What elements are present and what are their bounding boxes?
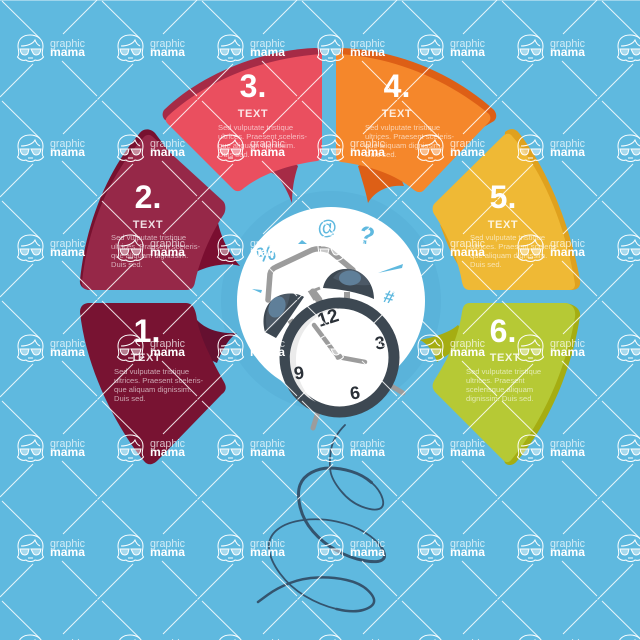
alarm clock: [263, 249, 403, 428]
icon: wedge right: [378, 264, 403, 273]
icon: question mark: ?: [356, 221, 377, 251]
number 2: 2.: [135, 179, 161, 215]
body text 5: Duis sed.: [470, 260, 502, 269]
body text 5: [470, 233, 560, 269]
body text 3: Duis sed.: [218, 150, 250, 159]
body text 1: ultrices. Praesent sceleris-: [114, 376, 204, 385]
number 4: 4.: [384, 68, 410, 104]
body text 2: Sed vulputate tristique: [111, 233, 186, 242]
top knob: [313, 292, 319, 300]
body text 6: scelerisque aliquam: [466, 385, 533, 394]
numerals: [293, 305, 386, 404]
body text 1: Duis sed.: [114, 394, 146, 403]
numerals: 12: [315, 305, 341, 332]
body text 2: [111, 233, 201, 269]
icon: wedge left: [252, 289, 262, 293]
left bell: [263, 294, 304, 338]
spring: [258, 425, 384, 611]
feet: [313, 384, 403, 428]
label 6: TEXT: [490, 352, 520, 364]
icon: triangle: [298, 240, 307, 244]
panel 2: [80, 129, 240, 290]
white clock disc: [237, 207, 425, 395]
bell handle: [268, 249, 353, 300]
floating symbols: [252, 215, 403, 308]
label 5: TEXT: [488, 219, 518, 231]
numerals: 9: [293, 362, 305, 384]
body text 6: ultrices. Praesent: [466, 376, 526, 385]
body text 4: que aliquam dignissim.: [365, 141, 442, 150]
body text 4: [365, 123, 455, 159]
body text 5: ultrices. Praesent sceleris-: [470, 242, 560, 251]
panel 1: [80, 303, 237, 464]
top edge line: [0, 0, 640, 1]
label 4: TEXT: [382, 108, 412, 120]
number 5: 5.: [490, 179, 516, 215]
label 2: TEXT: [133, 219, 163, 231]
body text 1: Sed vulputate tristique: [114, 367, 189, 376]
body text 4: Sed vulputate tristique: [365, 123, 440, 132]
body text 6: [466, 367, 541, 403]
clock hands: [314, 325, 365, 362]
body text 4: Duis sed.: [365, 150, 397, 159]
body text 2: que aliquam dignissim.: [111, 251, 188, 260]
icon: hash: #: [382, 286, 396, 308]
body text 4: ultrices. Praesent sceleris-: [365, 132, 455, 141]
panel 3: [163, 48, 322, 203]
number 6: 6.: [490, 313, 516, 349]
label 3: TEXT: [238, 108, 268, 120]
numerals: 3: [374, 332, 386, 354]
body text 6: dignissim. Duis sed.: [466, 394, 534, 403]
face shadow crescent: [290, 308, 338, 402]
body text 2: ultrices. Praesent sceleris-: [111, 242, 201, 251]
number 3: 3.: [240, 68, 266, 104]
body text 3: que aliquam dignissim.: [218, 141, 295, 150]
body text 2: Duis sed.: [111, 260, 143, 269]
body text 5: que aliquam dignissim.: [470, 251, 547, 260]
body text 1: que aliquam dignissim.: [114, 385, 191, 394]
right bell stem and left bell stem: [290, 292, 347, 332]
icon: at sign: @: [316, 215, 339, 241]
number 1: 1.: [134, 313, 160, 349]
body text 3: Sed vulputate tristique: [218, 123, 293, 132]
clock face: [285, 303, 394, 412]
body text 1: [114, 367, 204, 403]
body text 3: ultrices. Praesent sceleris-: [218, 132, 308, 141]
panel 6: [420, 303, 580, 465]
panel 5: [433, 129, 580, 290]
label 1: TEXT: [131, 352, 161, 364]
body text 6: Sed vulputate tristique: [466, 367, 541, 376]
central halo circle: [221, 191, 441, 411]
icon: percent: %: [255, 241, 278, 268]
right bell: [323, 269, 374, 299]
numerals: 6: [349, 382, 361, 404]
body text 3: [218, 123, 308, 159]
body text 5: Sed vulputate tristique: [470, 233, 545, 242]
panel 4: [336, 48, 496, 203]
